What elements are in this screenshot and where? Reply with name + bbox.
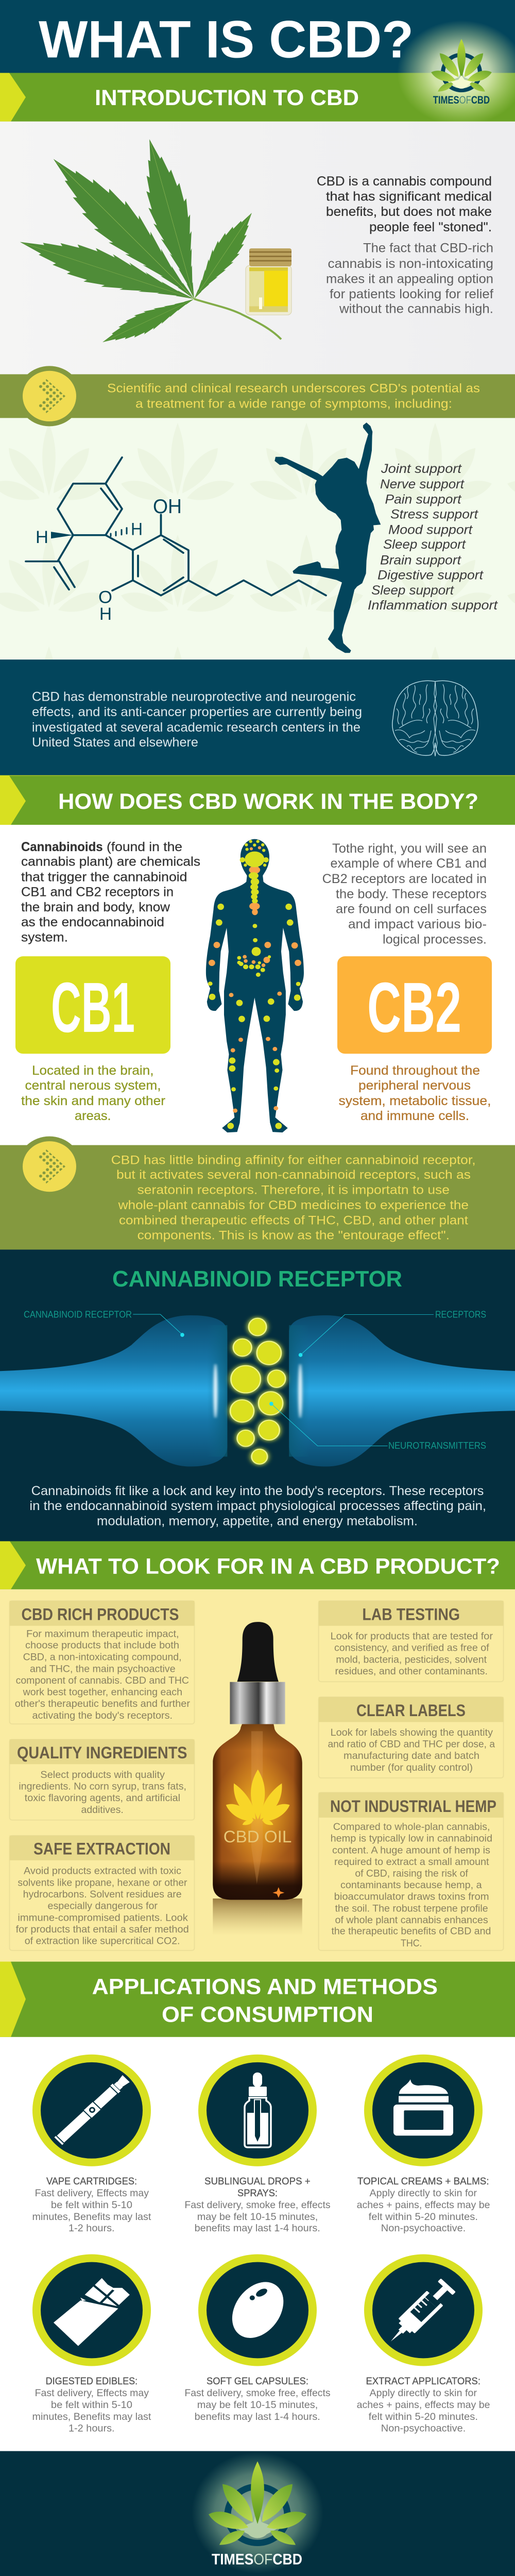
panel: cannabinoid receptor <box>0 1249 515 1541</box>
text: receptor location note: the body. These receptors <box>336 887 487 901</box>
section heading: applications and methods: APPLICATIONS AND METHODS <box>92 1975 438 1999</box>
text: extract applicators: felt within 5-20 minutes. <box>369 2411 478 2422</box>
section heading: what to look for <box>0 1541 515 1589</box>
card: quality ingredients: Select products with quality <box>40 1769 165 1781</box>
callout: binding affinity banner: CBD has little binding affinity for either cannabinoid receptor, <box>111 1154 476 1167</box>
section heading: applications and methods: OF CONSUMPTION <box>162 2003 373 2027</box>
text: extract applicators: EXTRACT APPLICATORS: <box>366 2376 480 2387</box>
card: clear labels <box>319 1697 504 1778</box>
text: vape cartridges: VAPE CARTRIDGES: <box>46 2176 137 2187</box>
chart: CBD molecule: H <box>36 528 48 547</box>
text: cannabinoids definition: (found in the <box>107 840 182 854</box>
text: receptor location note: Tothe right, you will see an <box>332 842 487 856</box>
card: CBD rich products: choose products that include both <box>25 1640 179 1651</box>
text: digested edibles: minutes, Benefits may last <box>32 2411 151 2422</box>
text: extract applicators: aches + pains, effects may be <box>357 2400 490 2411</box>
text: lock and key <box>29 1484 486 1528</box>
text: receptor location note: are found on cell surfaces <box>336 902 487 916</box>
text: soft gel capsules: benefits may last 1-4 hours. <box>195 2411 320 2422</box>
list: supported symptoms: Digestive support <box>377 568 484 582</box>
text: topical creams: Apply directly to skin for <box>370 2188 477 2199</box>
card: clear labels: number (for quality control) <box>350 1762 473 1773</box>
chart: CBD molecule: O <box>98 587 112 607</box>
text: intro statement <box>317 175 492 234</box>
heading: cannabinoid receptor: CANNABINOID RECEPTOR <box>112 1267 402 1292</box>
text: CB1 description: Located in the brain, <box>32 1063 154 1078</box>
text: intro statement: that has significant medical <box>326 190 492 204</box>
text: vape cartridges: Fast delivery, Effects may <box>35 2188 149 2199</box>
section heading: how does CBD work <box>0 775 515 825</box>
text: extract applicators: Apply directly to skin for <box>370 2387 477 2399</box>
icon: soft gel capsule <box>202 2258 313 2362</box>
text: CB2 description <box>339 1063 491 1123</box>
card: quality ingredients: toxic flavoring agents, and artificial <box>25 1793 180 1804</box>
list: supported symptoms: Mood support <box>388 523 473 537</box>
card: CBD rich products: For maximum therapeutic impact, <box>26 1629 179 1639</box>
image: cannabis leaf <box>14 134 281 352</box>
callout: research banner: Scientific and clinical research underscores CBD's potential as <box>107 382 480 395</box>
text: CB1 description: the skin and many other <box>21 1094 165 1108</box>
list: supported symptoms: Inflammation support <box>368 599 498 613</box>
panel: product checklist <box>0 1589 515 1962</box>
text: CB2 description: system, metabolic tissue, <box>339 1094 491 1108</box>
chart: CBD molecule: OH <box>153 496 182 518</box>
card: CBD rich products: CBD RICH PRODUCTS <box>22 1605 179 1624</box>
text: intro detail: The fact that CBD-rich <box>363 241 493 255</box>
chart: CBD molecule <box>26 457 326 624</box>
card: clear labels: Look for labels showing the quantity <box>331 1727 493 1738</box>
text: topical creams <box>357 2176 490 2234</box>
card: not industrial hemp: bioaccumulator draws toxins from <box>334 1891 489 1903</box>
list: supported symptoms: Pain support <box>385 493 462 506</box>
list: supported symptoms: Stress support <box>390 507 478 521</box>
text: digested edibles <box>32 2376 151 2434</box>
logo: Times of CBD header <box>397 21 515 125</box>
card: safe extraction: solvents like propane, hexane or other <box>18 1877 187 1888</box>
card: safe extraction: immune-compromised patients. Look <box>18 1912 188 1923</box>
card: CB1: CB1 <box>51 969 135 1047</box>
text: CB1 description <box>21 1063 165 1123</box>
card: safe extraction: of extraction like supercritical CO2. <box>25 1936 180 1946</box>
text: vape cartridges: 1-2 hours. <box>68 2223 115 2234</box>
card: CBD rich products: component of cannabis. CBD and THC <box>16 1675 189 1686</box>
logo: Times of CBD footer <box>192 2452 323 2573</box>
callout: binding affinity banner: seratonin receptors. Therefore, it is importatn to use <box>138 1183 450 1197</box>
list: supported symptoms: Nerve support <box>380 478 465 492</box>
text: cannabinoids definition: that trigger the cannabinoid <box>21 870 187 884</box>
text: cannabinoids definition: Cannabinoids <box>21 840 103 854</box>
card: safe extraction: for products that entail a safer method <box>16 1924 189 1935</box>
text: soft gel capsules: Fast delivery, smoke free, effects <box>184 2387 331 2399</box>
card: not industrial hemp: THC. <box>401 1938 422 1949</box>
text: neuroprotective note <box>32 690 362 750</box>
text: topical creams: felt within 5-20 minutes. <box>369 2211 478 2223</box>
logo: Times of CBD footer: TIMESOFCBD <box>212 2551 302 2568</box>
icon: vape cartridge <box>37 2058 147 2162</box>
text: CB1 description: areas. <box>75 1109 111 1123</box>
icon: brain <box>392 681 478 756</box>
text: cannabinoids definition: the brain and body, know <box>21 901 170 914</box>
card: lab testing: mold, bacteria, pesticides, solvent <box>336 1654 487 1665</box>
section heading: introduction: INTRODUCTION TO CBD <box>95 86 359 110</box>
card: lab testing <box>319 1601 504 1682</box>
text: sublingual drops: Fast delivery, smoke free, effects <box>184 2199 331 2211</box>
section heading: what to look for: WHAT TO LOOK FOR IN A CBD PRODUCT? <box>36 1554 500 1579</box>
text: cannabinoids definition: as the endocannabinoid <box>21 916 164 929</box>
text: receptor location note: example of where CB1 and <box>331 857 487 871</box>
text: sublingual drops: benefits may last 1-4 hours. <box>195 2223 320 2234</box>
list: supported symptoms: Brain support <box>380 553 461 567</box>
text: CB2 description: peripheral nervous <box>358 1079 471 1093</box>
card: clear labels: and ratio of CBD and THC per dose, a <box>328 1739 495 1750</box>
text: sublingual drops: may be felt 10-15 minutes, <box>197 2211 318 2223</box>
card: not industrial hemp: required to extract a small amount <box>334 1856 489 1868</box>
card: safe extraction: hydrocarbons. Solvent residues are <box>23 1889 182 1900</box>
panel: neuroprotective <box>0 659 515 776</box>
text: digested edibles: be felt within 5-10 <box>51 2400 132 2411</box>
card: not industrial hemp: the soil. The robust terpene profile <box>335 1903 488 1914</box>
card: quality ingredients: QUALITY INGREDIENTS <box>17 1744 187 1762</box>
text: lock and key: Cannabinoids fit like a lock and key into the body's receptors. These receptors <box>31 1484 484 1498</box>
text: neuroprotective note: investigated at several academic research centers in the <box>32 720 360 735</box>
card: CBD rich products: and THC, the main psychoactive <box>30 1664 176 1674</box>
card: safe extraction: especially dangerous for <box>48 1901 158 1911</box>
text: cannabinoids definition: system. <box>21 930 68 944</box>
card: lab testing: Look for products that are tested for <box>331 1631 493 1642</box>
text: intro detail <box>326 241 494 316</box>
text: vape cartridges: minutes, Benefits may last <box>32 2211 151 2223</box>
icon: cream jar <box>368 2058 478 2162</box>
text: topical creams: TOPICAL CREAMS + BALMS: <box>357 2176 489 2187</box>
chart: CBD molecule: H <box>99 604 112 624</box>
text: soft gel capsules: SOFT GEL CAPSULES: <box>207 2376 308 2387</box>
section heading: how does CBD work: HOW DOES CBD WORK IN THE BODY? <box>58 789 478 814</box>
text: intro statement: CBD is a cannabis compound <box>317 175 492 189</box>
text: intro detail: without the cannabis high. <box>339 302 493 316</box>
image: CBD oil bottle <box>213 1622 302 1936</box>
text: CB2 description: Found throughout the <box>350 1063 480 1078</box>
text: vape cartridges <box>32 2176 151 2234</box>
figure: human body with receptor dots <box>206 839 304 1132</box>
text: receptor location note: logical processes. <box>383 933 487 946</box>
callout: binding affinity banner: components. This is know as the "entourage effect". <box>138 1229 450 1242</box>
text: lock and key: modulation, memory, appetite, and energy metabolism. <box>97 1514 418 1528</box>
card: not industrial hemp: content. A huge amount of hemp is <box>332 1845 490 1856</box>
header band <box>0 0 515 73</box>
text: CB2 description: and immune cells. <box>360 1109 469 1123</box>
card: not industrial hemp: contaminants because hemp, a <box>340 1880 483 1891</box>
card: safe extraction: SAFE EXTRACTION <box>33 1840 170 1858</box>
card: quality ingredients <box>9 1739 195 1820</box>
panel: symptoms <box>0 418 515 659</box>
list: supported symptoms <box>368 462 498 613</box>
footer <box>0 2451 515 2576</box>
text: intro statement: benefits, but does not make <box>326 205 492 219</box>
text: neuroprotective note: effects, and its anti-cancer properties are currently being <box>32 705 362 719</box>
card: not industrial hemp: of whole plant cannabis enhances <box>335 1915 488 1926</box>
card: lab testing: residues, and other contaminants. <box>335 1666 488 1677</box>
icon: chocolate bar <box>37 2258 147 2362</box>
label: receptors: RECEPTORS <box>435 1310 486 1320</box>
card: lab testing: consistency, and verified as free of <box>334 1642 489 1654</box>
card: not industrial hemp: the therapeutic benefits of CBD and <box>332 1926 491 1937</box>
text: lock and key: in the endocannabinoid system impact physiological processes affecting pain, <box>29 1499 486 1513</box>
chart: CBD molecule: H <box>131 520 143 539</box>
label: cannabinoid receptor: CANNABINOID RECEPTOR <box>24 1310 132 1320</box>
text: intro detail: for patients looking for relief <box>330 287 494 301</box>
callout: binding affinity banner <box>0 1137 515 1249</box>
card: lab testing: LAB TESTING <box>362 1605 460 1624</box>
card: CB1 <box>15 956 170 1054</box>
text: topical creams: Non-psychoactive. <box>381 2223 466 2234</box>
text: cannabinoids definition: CB1 and CB2 receptors in <box>21 885 174 899</box>
card: CBD rich products: CBD, a non-intoxicating compound, <box>23 1652 182 1663</box>
image: oil vial <box>246 248 291 315</box>
card: clear labels: manufacturing date and batch <box>344 1751 479 1761</box>
card: quality ingredients: ingredients. No corn syrup, trans fats, <box>19 1781 186 1792</box>
callout: binding affinity banner: whole-plant cannabis for CBD medicines to experience the <box>118 1199 469 1212</box>
card: not industrial hemp: hemp is typically low in cannabinoid <box>331 1833 492 1844</box>
logo: Times of CBD header: TIMESOFCBD <box>433 94 490 106</box>
image: CBD oil bottle: CBD OIL <box>224 1828 291 1846</box>
section heading: applications and methods <box>0 1962 515 2037</box>
card: not industrial hemp: Compared to whole-plan cannabis, <box>333 1821 490 1833</box>
card: CBD rich products <box>9 1601 195 1724</box>
text: vape cartridges: be felt within 5-10 <box>51 2199 132 2211</box>
card: not industrial hemp: of CBD, raising the risk of <box>355 1868 468 1879</box>
section heading: introduction <box>0 73 515 122</box>
text: digested edibles: DIGESTED EDIBLES: <box>46 2376 138 2387</box>
callout: binding affinity banner: but it activates several non-cannabinoid receptors, such as <box>116 1168 471 1182</box>
card: CBD rich products: other's therapeutic benefits and further <box>15 1699 190 1709</box>
title: WHAT IS CBD? <box>39 10 414 69</box>
text: digested edibles: Fast delivery, Effects may <box>35 2387 149 2399</box>
card: safe extraction <box>9 1836 195 1951</box>
text: cannabinoids definition <box>21 840 200 944</box>
label: neurotransmitters: NEUROTRANSMITTERS <box>388 1440 486 1451</box>
text: sublingual drops <box>184 2176 331 2234</box>
text: digested edibles: 1-2 hours. <box>68 2423 115 2434</box>
text: sublingual drops: SPRAYS: <box>237 2188 278 2199</box>
card: not industrial hemp <box>319 1792 504 1951</box>
card: CBD rich products: activating the body's receptors. <box>32 1710 173 1721</box>
text: receptor location note: CB2 receptors are located in <box>322 872 487 886</box>
callout: research banner <box>0 366 515 426</box>
text: neuroprotective note: United States and elsewhere <box>32 736 198 750</box>
card: clear labels: CLEAR LABELS <box>356 1702 466 1720</box>
card: safe extraction: Avoid products extracted with toxic <box>24 1866 181 1876</box>
text: cannabinoids definition: cannabis plant) are chemicals <box>21 855 200 869</box>
text: CB1 description: central nerous system, <box>25 1079 161 1093</box>
text: intro detail: cannabis is non-intoxicating <box>328 257 493 271</box>
text: receptor location note <box>322 842 487 946</box>
list: supported symptoms: Sleep support <box>371 583 454 598</box>
text: intro statement: people feel "stoned". <box>369 221 492 234</box>
callout: research banner: a treatment for a wide range of symptoms, including: <box>135 397 452 411</box>
card: CB2: CB2 <box>367 969 461 1047</box>
text: soft gel capsules: may be felt 10-15 minutes, <box>197 2400 318 2411</box>
icon: sublingual dropper <box>202 2058 313 2162</box>
card: CBD rich products: work best together, enhancing each <box>23 1687 182 1698</box>
text: sublingual drops: SUBLINGUAL DROPS + <box>204 2176 311 2187</box>
icon: syringe applicator <box>368 2258 478 2362</box>
text: extract applicators <box>357 2376 490 2434</box>
list: supported symptoms: Sleep support <box>383 538 466 552</box>
callout: binding affinity banner: combined therapeutic effects of THC, CBD, and other plant <box>119 1214 468 1227</box>
text: neuroprotective note: CBD has demonstrable neuroprotective and neurogenic <box>32 690 356 704</box>
list: supported symptoms: Joint support <box>381 462 462 476</box>
text: receptor location note: and impact various bio- <box>348 918 487 931</box>
card: CB2 <box>337 956 492 1054</box>
text: intro detail: makes it an appealing option <box>326 272 493 286</box>
icon: jumping woman silhouette <box>274 422 381 653</box>
text: topical creams: aches + pains, effects may be <box>357 2199 490 2211</box>
diagram: synapse <box>0 1314 515 1467</box>
text: soft gel capsules <box>184 2376 331 2422</box>
panel: introduction <box>0 122 515 374</box>
text: extract applicators: Non-psychoactive. <box>381 2423 466 2434</box>
card: quality ingredients: additives. <box>81 1804 124 1816</box>
